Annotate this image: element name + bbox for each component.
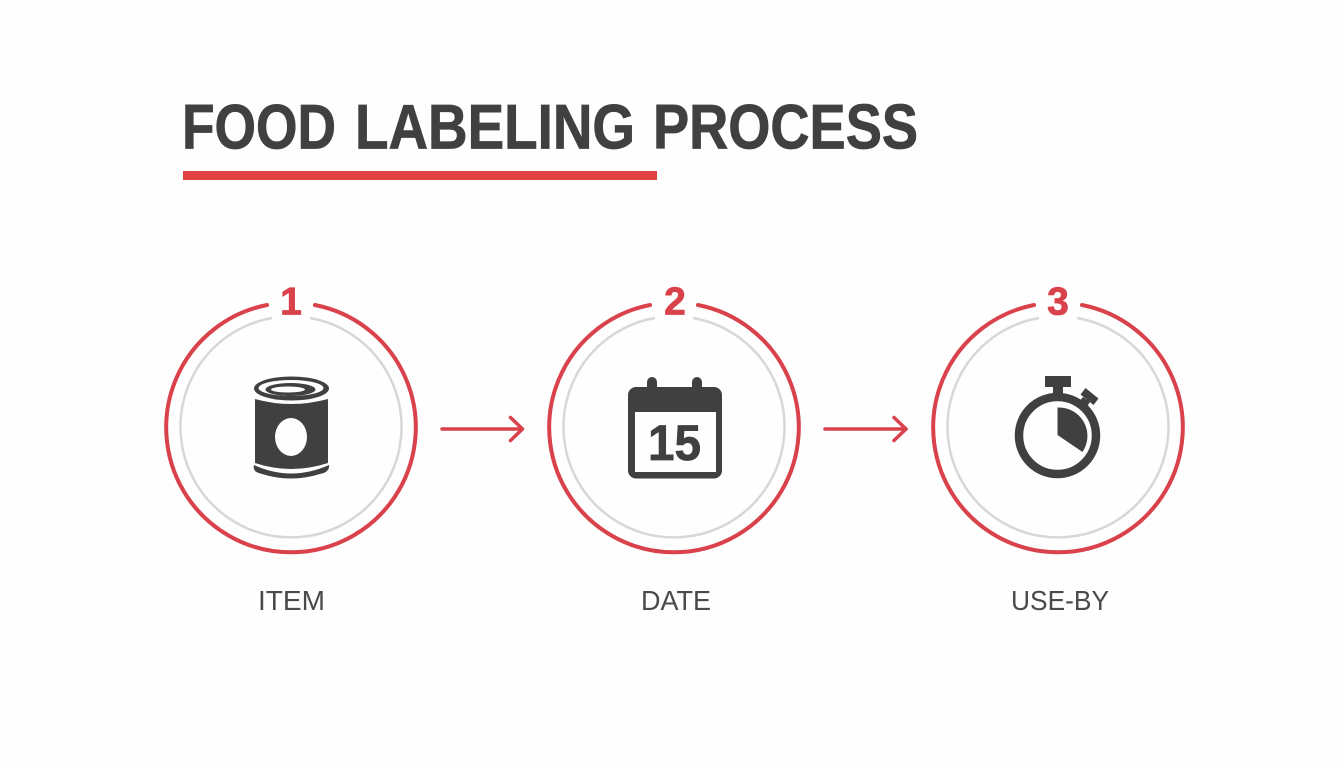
title: PROCESS <box>653 92 918 162</box>
inner ring 3 <box>948 318 1169 537</box>
number 1: 1 <box>280 280 302 324</box>
number 3: 3 <box>1047 280 1069 324</box>
outer ring 3 <box>933 305 1183 552</box>
inner ring 1 <box>181 318 402 537</box>
step 3: use-by <box>933 280 1183 616</box>
icon: calendar: 15 <box>648 415 701 471</box>
title <box>182 92 918 162</box>
label: item: ITEM <box>258 585 325 616</box>
label: use-by: USE-BY <box>1011 585 1109 616</box>
number 2: 2 <box>664 280 686 324</box>
label: date: DATE <box>641 585 711 616</box>
title: FOOD <box>182 92 336 162</box>
icon: food can <box>254 376 329 478</box>
icon: stopwatch <box>1019 376 1098 474</box>
inner ring 2 <box>563 318 785 537</box>
outer ring 2 <box>549 305 799 552</box>
title underline <box>183 171 657 180</box>
step 1: item <box>166 280 416 616</box>
icon: calendar <box>628 377 722 478</box>
arrow 2 to 3 <box>825 418 906 440</box>
title: LABELING <box>355 92 635 162</box>
outer ring 1 <box>166 305 416 552</box>
arrow 1 to 2 <box>442 418 522 440</box>
step 2: date <box>549 280 799 616</box>
